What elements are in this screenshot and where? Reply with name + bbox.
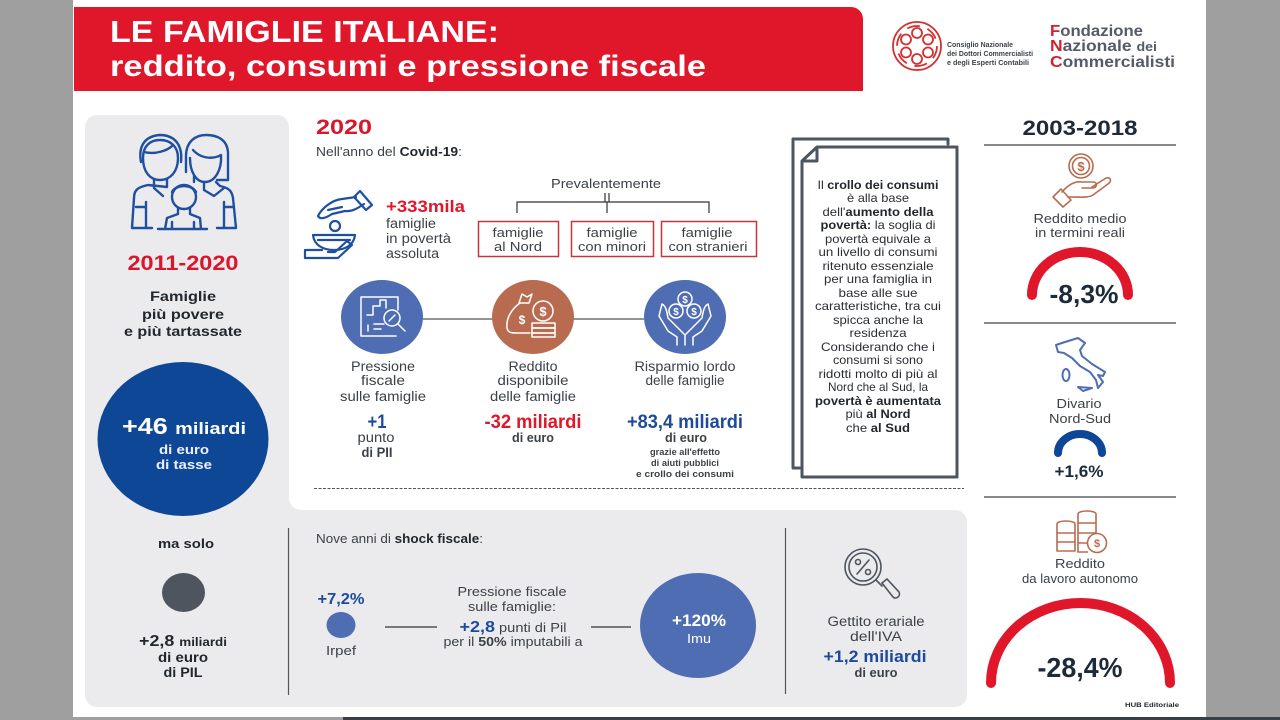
callout: document: più al Nord: [846, 407, 910, 421]
text: +333mila famiglie: [386, 197, 466, 261]
callout: +46 miliardi: di tasse: [156, 457, 212, 472]
chart: Imu bubble: Imu: [687, 631, 711, 646]
gauge: -28,4%: [991, 603, 1170, 683]
text: pressione fiscale sulle famiglie: per il 50% imputabili a: [444, 634, 583, 649]
text: reddito medio: in termini reali: [1035, 225, 1125, 240]
callout: document: per una famiglia in: [824, 272, 932, 286]
text: divario nord-sud: Nord-Sud: [1049, 411, 1111, 426]
icon: disposable income circle: $: [519, 313, 526, 327]
text: gettito erariale IVA: di euro: [854, 665, 898, 680]
text: +2,8 miliardi di euro di PIL: di PIL: [164, 665, 202, 680]
text: famiglie più povere: più povere: [142, 306, 224, 322]
icon: hand with coin: [1053, 154, 1110, 207]
callout: document: [793, 139, 957, 477]
chart: Imu bubble: +120%: [672, 611, 726, 630]
column: risparmio lordo: grazie all'effetto: [650, 447, 721, 457]
column: pressione fiscale: punto: [358, 430, 394, 445]
callout: document: ritenuto essenziale: [822, 259, 934, 273]
column: reddito disponibile: Reddito: [508, 359, 558, 374]
column: risparmio lordo: delle famiglie: [646, 373, 724, 388]
column: pressione fiscale: sulle famiglie: [340, 389, 426, 404]
text: +333mila famiglie: in povertà: [386, 231, 452, 246]
callout: +46 miliardi: [98, 362, 268, 516]
icon: fiscal pressure circle: [341, 280, 423, 354]
callout: document: povertà è aumentata: [815, 394, 941, 408]
credit: HUB Editoriale: HUB Editoriale: [1125, 702, 1179, 709]
arrow: left connector: [385, 626, 437, 628]
column: pressione fiscale: di PII: [362, 445, 392, 460]
text: +333mila famiglie: famiglie: [386, 216, 436, 231]
callout: document: residenza: [850, 326, 907, 340]
icon: savings circle: $: [673, 307, 679, 318]
callout: document: Il crollo dei consumi: [818, 178, 938, 192]
column: reddito disponibile: [484, 359, 582, 445]
callout: document: Considerando che i: [821, 340, 935, 354]
chart: Irpef bubble: +7,2%: [318, 591, 364, 608]
text: gettito erariale IVA: [824, 614, 926, 680]
column: risparmio lordo: [627, 359, 743, 479]
icon: coin stacks: [1057, 511, 1106, 552]
text: gettito erariale IVA: +1,2 miliardi: [824, 647, 926, 666]
column: reddito disponibile: -32 miliardi: [484, 412, 582, 433]
logo: Fondazione Nazionale dei Commercialisti: Fondazione: [1050, 23, 1143, 40]
callout: document: caratteristiche, tra cui: [815, 299, 941, 313]
text: +2,8 miliardi di euro di PIL: +2,8 miliardi: [139, 633, 227, 650]
gauge: +1,6%: [1054, 434, 1104, 481]
text: pressione fiscale sulle famiglie: Pressione fiscale: [458, 584, 566, 599]
box: famiglie con minori: con minori: [578, 239, 646, 254]
logo: Fondazione Nazionale dei Commercialisti: Nazionale dei: [1050, 38, 1157, 55]
column: pressione fiscale: fiscale: [361, 373, 405, 388]
left column: family summary: [98, 135, 268, 680]
chart: Imu bubble: [640, 573, 756, 678]
section: 2020 heading: [316, 116, 462, 159]
callout: document: dell'aumento della: [822, 205, 934, 219]
text: reddito da lavoro autonomo: [1022, 556, 1138, 586]
box: famiglie con stranieri: famiglie: [682, 225, 732, 240]
text: famiglie più povere: [124, 288, 242, 339]
logo: Consiglio Nazionale: dei Dottori Commercialisti: [947, 51, 1033, 58]
logo: Consiglio Nazionale: Consiglio Nazionale: [947, 42, 1013, 49]
text: reddito da lavoro autonomo: da lavoro autonomo: [1022, 571, 1138, 586]
bracket: prevalentemente: Prevalentemente: [551, 176, 661, 191]
text: pressione fiscale sulle famiglie: sulle famiglie:: [468, 599, 556, 614]
title banner: reddito, consumi e pressione fiscale: [110, 50, 706, 83]
gauge: -8,3%: [1032, 252, 1128, 309]
text: gettito erariale IVA: Gettito erariale: [828, 614, 924, 629]
box: famiglie al Nord: famiglie: [492, 225, 544, 240]
circle: +2,8 miliardi: [162, 573, 205, 612]
callout: document: un livello di consumi: [818, 245, 938, 259]
icon: savings circle: [644, 280, 726, 354]
logo: Consiglio Nazionale: e degli Esperti Contabili: [947, 60, 1029, 67]
callout: document: che al Sud: [846, 421, 910, 435]
section: 2020 heading: 2020: [316, 116, 372, 139]
bracket: prevalentemente: [517, 176, 709, 213]
divider: vertical right: [784, 528, 786, 694]
icon: hand dropping coin into bowl: [305, 191, 372, 258]
icon: savings circle: $: [682, 295, 688, 306]
chart: Irpef bubble: [318, 591, 364, 658]
column: risparmio lordo: +83,4 miliardi: [627, 412, 743, 433]
text: +333mila famiglie: assoluta: [386, 246, 440, 261]
text: divario nord-sud: Divario: [1056, 396, 1102, 411]
heading: 2011-2020: 2011-2020: [128, 252, 238, 275]
column: pressione fiscale: [340, 359, 426, 460]
text: +2,8 miliardi di euro di PIL: di euro: [158, 650, 208, 665]
callout: document: Nord che al Sud, la: [828, 380, 928, 394]
chart: Irpef bubble: Irpef: [326, 643, 356, 658]
callout: document: è alla base: [847, 191, 909, 205]
text: nove anni di shock fiscale: Nove anni di shock fiscale :: [316, 532, 483, 546]
callout: document: spicca anche la: [833, 313, 923, 327]
icon: disposable income circle: [492, 280, 574, 354]
gauge: -8,3%: -8,3%: [1050, 279, 1118, 309]
column: reddito disponibile: delle famiglie: [490, 389, 576, 404]
text: +2,8 miliardi di euro di PIL: [139, 633, 227, 680]
column: pressione fiscale: Pressione: [351, 359, 415, 374]
column: pressione fiscale: +1: [368, 412, 387, 433]
text: reddito medio: [1034, 211, 1126, 240]
column: reddito disponibile: disponibile: [498, 373, 568, 388]
box: famiglie al Nord: al Nord: [494, 239, 542, 254]
icon: disposable income circle: $: [539, 304, 547, 319]
text: +333mila famiglie: +333mila: [386, 197, 466, 216]
gauge: -28,4%: -28,4%: [1038, 652, 1123, 683]
section: 2020 heading: Nell'anno del Covid-19 :: [316, 145, 462, 159]
callout: document: povertà equivale a: [825, 232, 931, 246]
arrow: right connector: [591, 626, 631, 628]
box: famiglie con minori: [572, 222, 654, 256]
icon: savings circle: $: [691, 307, 697, 318]
callout: +46 miliardi: +46 miliardi: [122, 413, 246, 439]
text: gettito erariale IVA: dell'IVA: [850, 629, 902, 644]
box: famiglie con stranieri: con stranieri: [668, 239, 748, 254]
divider: vertical left: [288, 528, 290, 695]
icon: family: [132, 135, 236, 229]
callout: +46 miliardi: di euro: [159, 442, 209, 457]
logo: Consiglio Nazionale: [893, 22, 1033, 70]
text: ma solo: ma solo: [158, 536, 214, 551]
callout: document: povertà: la soglia di: [820, 218, 936, 232]
title banner: [74, 7, 863, 91]
icon: magnifier with percent: [845, 549, 899, 598]
text: pressione fiscale sulle famiglie: [444, 584, 583, 649]
panel: grey L-shaped background: [85, 115, 967, 707]
icon: Italy map: [1056, 338, 1105, 391]
logo: Fondazione Nazionale dei Commercialisti: [1050, 23, 1175, 71]
box: famiglie con minori: famiglie: [586, 225, 638, 240]
text: pressione fiscale sulle famiglie: +2,8 punti di Pil: [460, 619, 567, 636]
title banner: LE FAMIGLIE ITALIANE:: [110, 14, 499, 49]
gauge: +1,6%: +1,6%: [1054, 462, 1104, 481]
text: reddito da lavoro autonomo: Reddito: [1055, 556, 1105, 571]
column: risparmio lordo: di euro: [665, 431, 707, 445]
column: risparmio lordo: Risparmio lordo: [634, 359, 736, 374]
text: famiglie più povere: Famiglie: [150, 288, 216, 304]
callout: document: consumi si sono: [833, 353, 923, 367]
icon: coin stacks: $: [1094, 538, 1100, 550]
text: famiglie più povere: e più tartassate: [124, 323, 242, 339]
heading: 2003-2018: 2003-2018: [1022, 117, 1138, 140]
text: divario nord-sud: [1049, 396, 1111, 426]
logo: Fondazione Nazionale dei Commercialisti: Commercialisti: [1050, 54, 1175, 71]
text: reddito medio: Reddito medio: [1034, 211, 1126, 226]
icon: hand with coin: $: [1077, 159, 1085, 174]
column: risparmio lordo: e crollo dei consumi: [636, 469, 734, 479]
callout: document: ridotti molto di più al: [818, 367, 938, 381]
column: reddito disponibile: di euro: [512, 431, 554, 445]
column: risparmio lordo: di aiuti pubblici: [651, 458, 719, 468]
callout: document: base alle sue: [838, 286, 918, 300]
box: famiglie al Nord: [478, 222, 558, 256]
box: famiglie con stranieri: [662, 222, 756, 256]
